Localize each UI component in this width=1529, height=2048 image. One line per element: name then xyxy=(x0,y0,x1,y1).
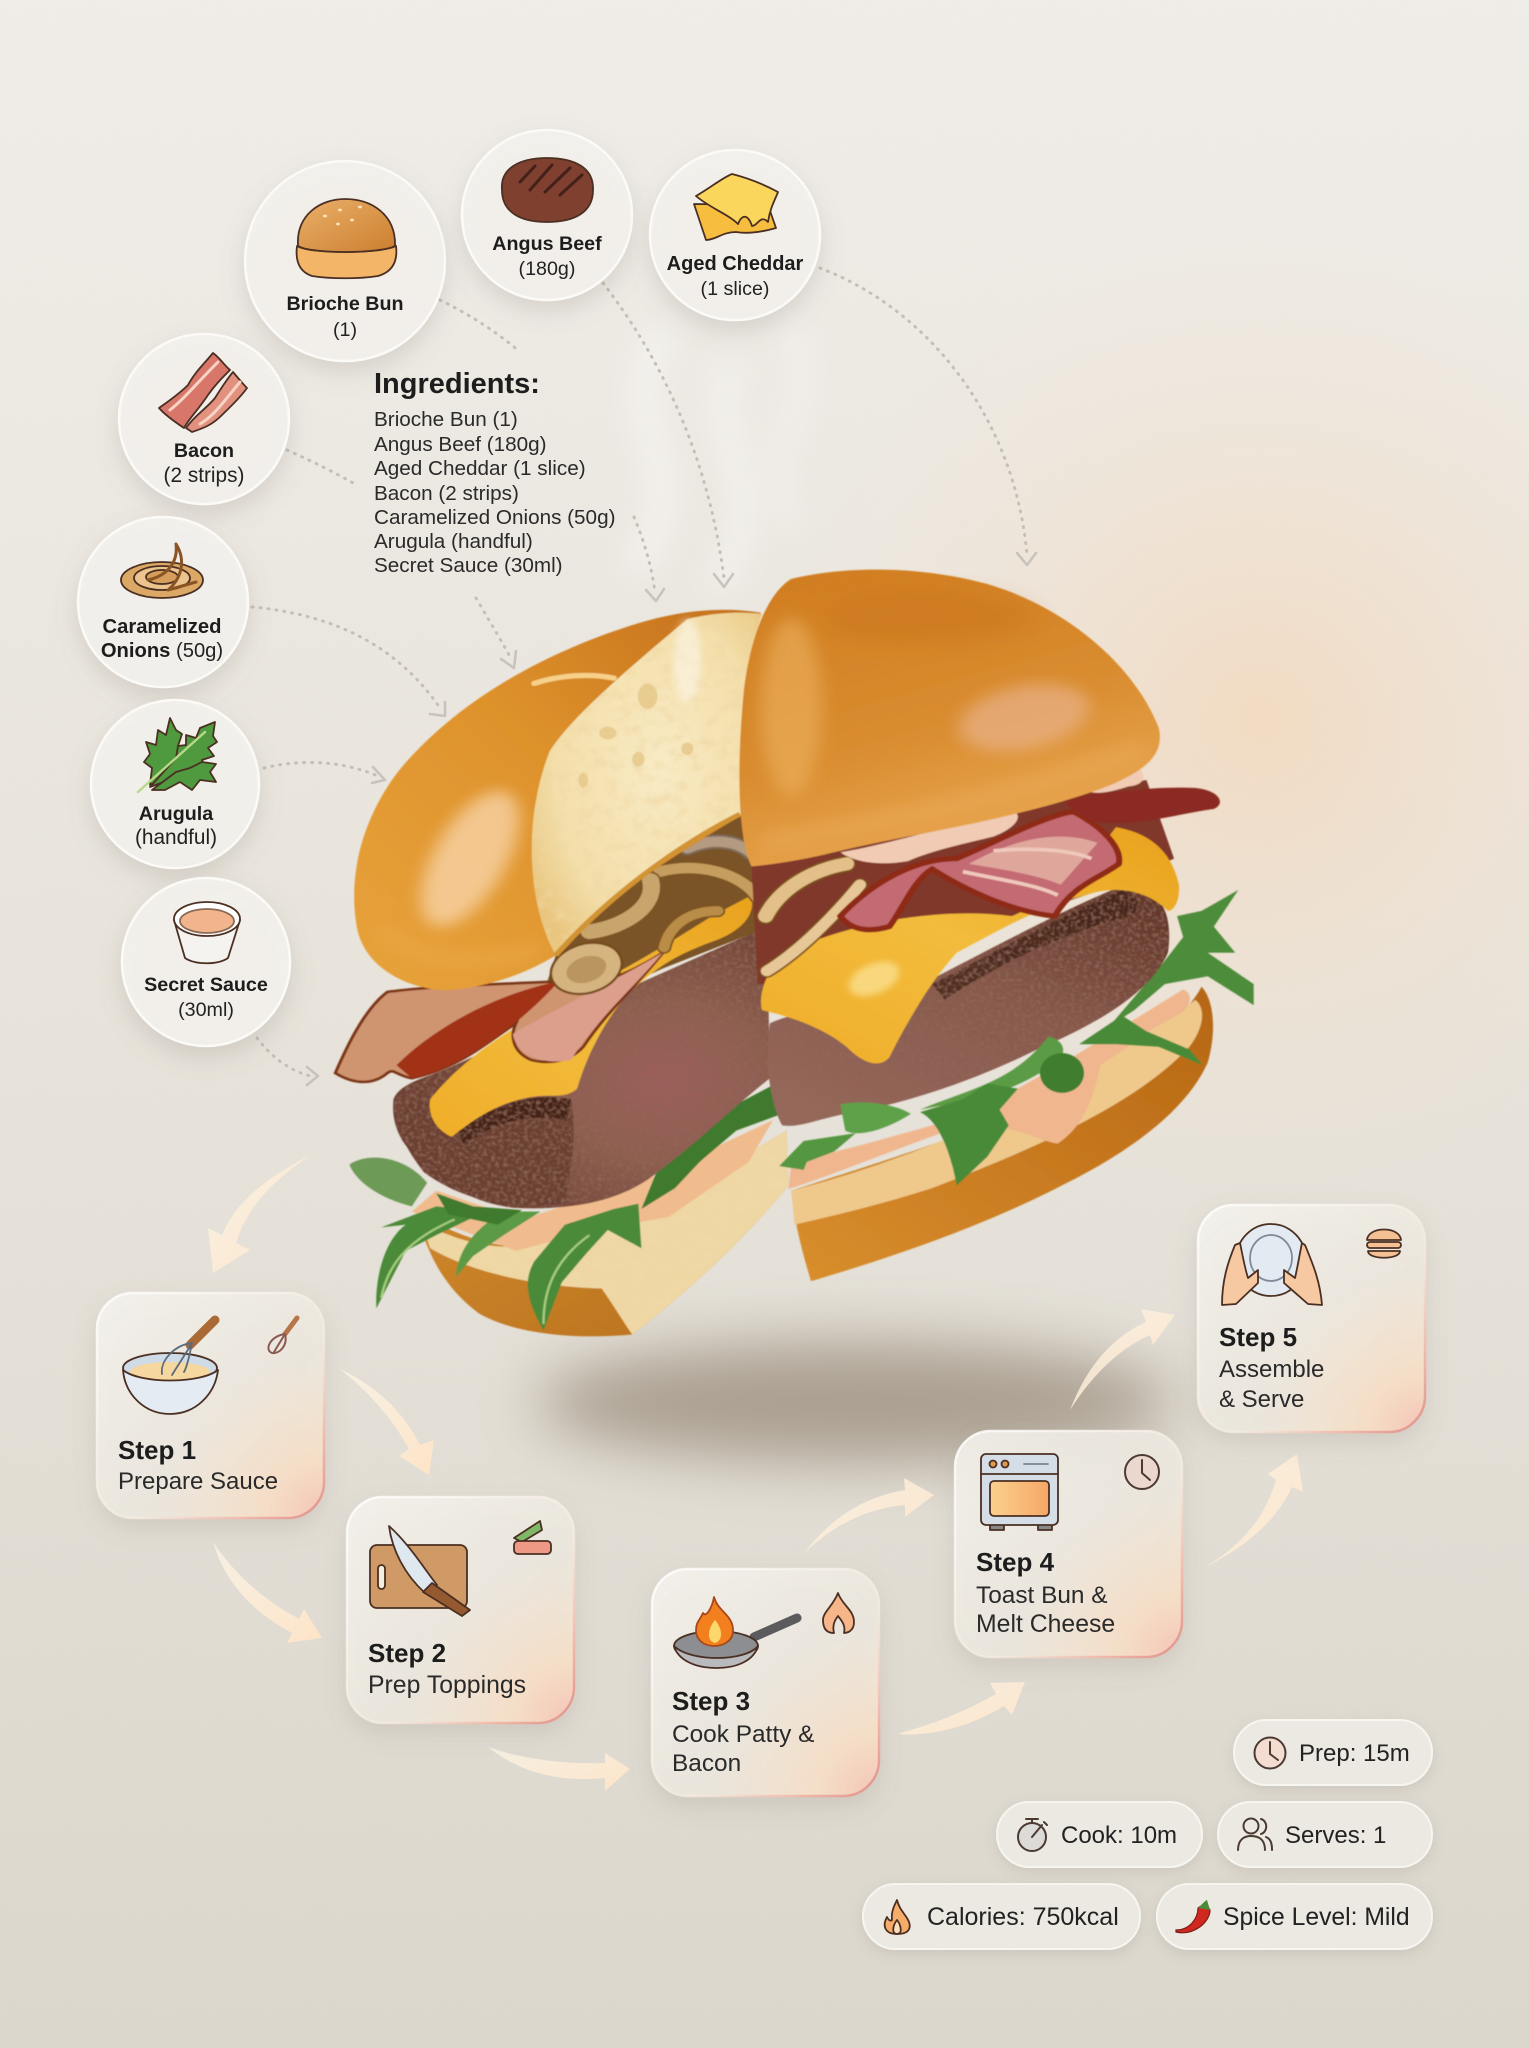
label: Calories: 750kcal xyxy=(927,1903,1119,1931)
label: Spice Level: Mild xyxy=(1223,1904,1410,1931)
icon: cheese xyxy=(694,174,778,240)
left patty xyxy=(393,927,770,1208)
step card 3 xyxy=(652,1569,879,1796)
far right bacon strip xyxy=(1061,788,1220,823)
steam wisps xyxy=(640,330,802,580)
label: (1 slice) xyxy=(701,278,769,300)
left onion backing xyxy=(547,812,770,1005)
flow arrow: step 4 to step 5 lower xyxy=(1205,1454,1303,1567)
label: (2 strips) xyxy=(164,464,244,487)
step card 2 xyxy=(347,1497,574,1723)
pill: spice level xyxy=(1157,1884,1432,1949)
icon: knife and board xyxy=(370,1526,470,1616)
left onions xyxy=(541,842,758,1003)
step description: Melt Cheese xyxy=(976,1611,1115,1638)
label: Cook: 10m xyxy=(1061,1822,1177,1849)
left bottom bun xyxy=(415,1131,788,1336)
flow arrow: step 3 to step 4 lower xyxy=(897,1682,1025,1734)
step card 4 xyxy=(955,1431,1182,1657)
icon: onions xyxy=(121,544,203,598)
icon: people xyxy=(1238,1818,1272,1850)
right sauce xyxy=(788,989,1190,1189)
icon: frying pan with flame xyxy=(674,1597,797,1668)
step description: Assemble xyxy=(1219,1356,1324,1383)
flow arrow: burger to step 1 xyxy=(208,1155,311,1273)
icon: small whisk xyxy=(268,1318,297,1353)
step text: Step 5 xyxy=(1219,1322,1297,1352)
pill: serves xyxy=(1218,1802,1432,1867)
icon: patty xyxy=(502,158,593,222)
icon: bun xyxy=(297,199,396,278)
ingredient: angus beef xyxy=(462,130,632,300)
ingredient: arugula xyxy=(91,700,259,868)
right onions xyxy=(766,864,860,971)
left sauce xyxy=(412,1120,773,1251)
label: Onions (50g) xyxy=(101,640,223,662)
icon: arugula leaves xyxy=(138,718,217,792)
step text: Step 4 xyxy=(976,1547,1055,1577)
label: (1) xyxy=(333,319,357,341)
left greens xyxy=(376,1083,779,1330)
flow arrow: step 1 to step 2 upper xyxy=(340,1369,434,1475)
right back arugula xyxy=(1110,890,1254,1026)
step text: Step 3 xyxy=(672,1686,750,1716)
step description: Prep Toppings xyxy=(368,1672,526,1699)
step text: Step 1 xyxy=(118,1435,196,1465)
right patty xyxy=(768,886,1169,1126)
right bacon xyxy=(840,812,1119,930)
step text: Step 2 xyxy=(368,1638,446,1668)
icon: clock xyxy=(1254,1738,1286,1768)
dotted connector: brioche bun xyxy=(440,300,520,668)
ingredients heading: Ingredients: xyxy=(374,368,540,400)
dotted connector: bacon xyxy=(287,450,664,601)
ingredient: aged cheddar xyxy=(650,150,820,320)
ingredient: brioche bun xyxy=(245,161,445,361)
step description: Bacon xyxy=(672,1750,741,1777)
ingredients list: Aged Cheddar (1 slice) xyxy=(374,457,586,480)
step description: Toast Bun & xyxy=(976,1582,1108,1609)
ingredients list: Secret Sauce (30ml) xyxy=(374,554,563,577)
step description: Cook Patty & xyxy=(672,1721,814,1748)
pill: prep time xyxy=(1234,1720,1432,1785)
step card 1 xyxy=(97,1293,324,1518)
step card 5 xyxy=(1198,1205,1425,1432)
ingredient: secret sauce xyxy=(122,878,290,1046)
burger left half xyxy=(335,610,788,1336)
backing under top bun xyxy=(752,780,1174,984)
ingredients list: Angus Beef (180g) xyxy=(374,433,547,456)
dotted connector: arugula xyxy=(264,762,385,783)
pill: cook time xyxy=(997,1802,1202,1867)
ground shadow xyxy=(535,1342,1175,1462)
label: (180g) xyxy=(519,258,575,280)
label: Aged Cheddar xyxy=(667,253,804,275)
icon: oven xyxy=(981,1454,1058,1530)
label: (30ml) xyxy=(178,999,234,1021)
left top bun xyxy=(354,610,762,990)
dotted connector: caramelized onions xyxy=(252,607,445,716)
left bacon xyxy=(335,953,663,1082)
ingredients list: Bacon (2 strips) xyxy=(374,482,519,505)
step description: & Serve xyxy=(1219,1386,1304,1413)
label: Serves: 1 xyxy=(1285,1822,1386,1849)
right front greens xyxy=(779,1015,1203,1185)
label: Prep: 15m xyxy=(1299,1740,1410,1767)
icon: chili pepper xyxy=(1176,1900,1210,1933)
ingredient: caramelized onions xyxy=(78,517,248,687)
top sauce xyxy=(840,770,1143,863)
label: Secret Sauce xyxy=(144,974,268,996)
dotted connector: angus beef xyxy=(603,283,733,587)
flow arrow: step 3 to step 4 upper xyxy=(805,1478,934,1552)
label: Brioche Bun xyxy=(286,293,404,315)
icon: bacon strips xyxy=(159,353,247,432)
ingredient: bacon xyxy=(119,334,289,504)
icon: hands holding plate xyxy=(1222,1224,1322,1305)
icon: small burger xyxy=(1367,1230,1401,1258)
label: (handful) xyxy=(135,826,217,849)
right cheese xyxy=(761,827,1179,1063)
icon: whisk and bowl xyxy=(123,1320,218,1414)
right bottom bun xyxy=(791,987,1213,1281)
icon: small clock xyxy=(1125,1455,1159,1489)
label: Arugula xyxy=(139,803,214,825)
icon: stopwatch xyxy=(1018,1819,1047,1851)
ingredients list: Brioche Bun (1) xyxy=(374,408,518,431)
label: Caramelized xyxy=(103,616,221,638)
flow arrow: step 4 to step 5 upper xyxy=(1070,1309,1175,1410)
icon: sauce cup xyxy=(174,902,240,963)
step description: Prepare Sauce xyxy=(118,1468,278,1495)
burger xyxy=(335,570,1254,1336)
ingredients list: Arugula (handful) xyxy=(374,530,533,553)
far left leaf xyxy=(349,1158,427,1206)
label: Bacon xyxy=(174,440,234,462)
icon: small flame xyxy=(823,1593,854,1633)
right top bun xyxy=(739,570,1160,866)
left cheese xyxy=(430,895,752,1137)
flow arrow: step 2 to step 3 xyxy=(488,1747,630,1791)
flow arrow: step 1 to step 2 lower xyxy=(213,1542,322,1643)
icon: small toppings xyxy=(514,1521,551,1554)
label: Angus Beef xyxy=(492,233,602,255)
dotted connector: aged cheddar xyxy=(820,268,1036,565)
icon: flame xyxy=(885,1900,910,1934)
ingredients list: Caramelized Onions (50g) xyxy=(374,506,615,529)
dotted connector: secret sauce xyxy=(257,1038,318,1085)
pill: calories xyxy=(863,1884,1140,1949)
burger right half xyxy=(739,570,1254,1281)
